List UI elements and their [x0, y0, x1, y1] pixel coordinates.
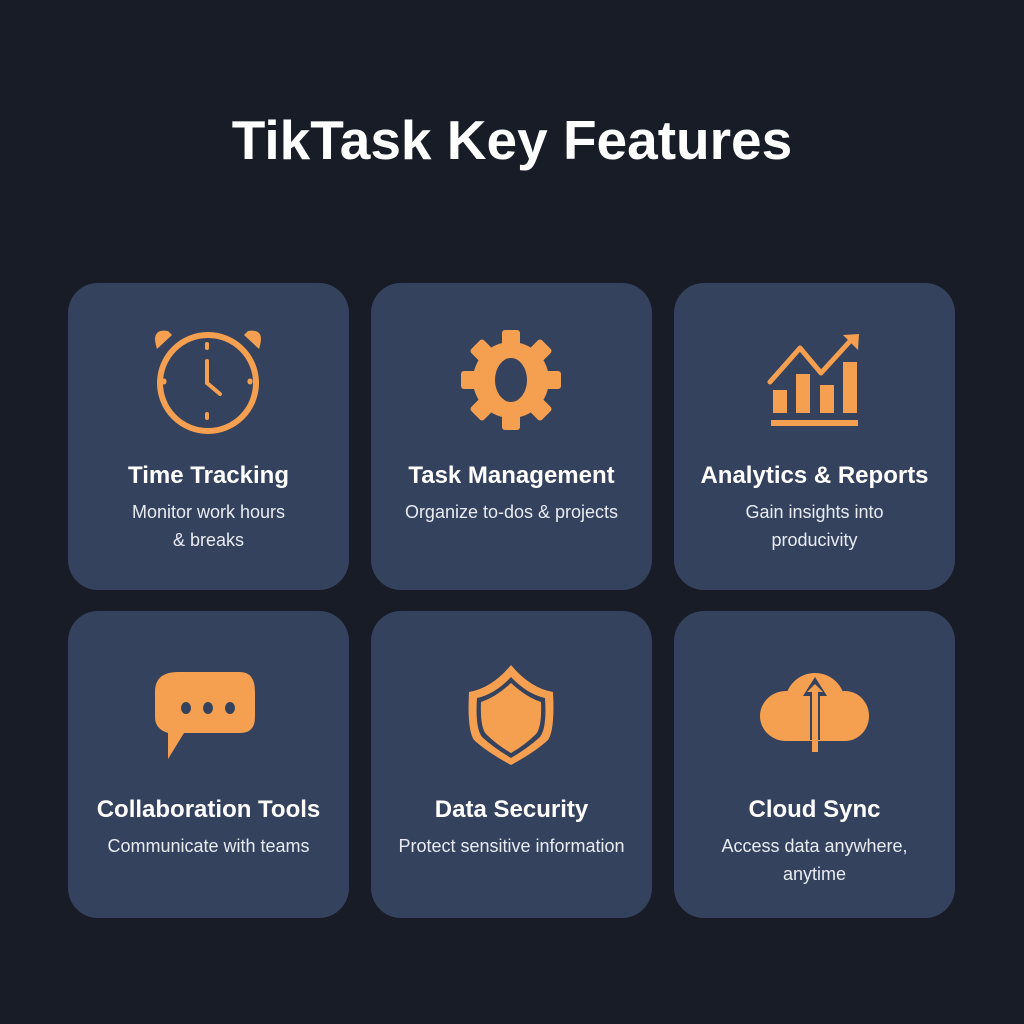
- icon: gear: [461, 330, 561, 430]
- description: Communicate with teams: [107, 836, 310, 856]
- description: & breaks: [173, 530, 244, 550]
- panel: time tracking: [68, 283, 349, 590]
- icon: shield: [468, 665, 554, 765]
- description: anytime: [783, 864, 846, 884]
- heading: Cloud Sync: [748, 796, 880, 823]
- description: Gain insights into: [745, 502, 884, 522]
- heading: Analytics & Reports: [700, 462, 929, 489]
- heading: Task Management: [408, 462, 615, 489]
- description: [745, 502, 884, 550]
- description: Access data anywhere,: [721, 836, 908, 856]
- title: TikTask Key Features: [232, 109, 792, 171]
- description: Organize to-dos & projects: [405, 502, 618, 522]
- icon: alarm clock: [155, 330, 261, 434]
- icon: chart: [768, 334, 859, 426]
- heading: Time Tracking: [128, 462, 289, 489]
- panel: task management: [371, 283, 652, 590]
- description: Protect sensitive information: [398, 836, 625, 856]
- heading: Data Security: [435, 796, 588, 823]
- icon: chat bubble: [155, 672, 255, 759]
- panel: analytics: [674, 283, 955, 590]
- heading: Collaboration Tools: [97, 796, 320, 823]
- panel: collaboration: [68, 611, 349, 918]
- icon: cloud upload: [760, 673, 869, 752]
- description: [132, 502, 285, 550]
- description: Monitor work hours: [132, 502, 285, 522]
- description: [721, 836, 908, 884]
- panel: data security: [371, 611, 652, 918]
- panel: cloud sync: [674, 611, 955, 918]
- description: producivity: [771, 530, 858, 550]
